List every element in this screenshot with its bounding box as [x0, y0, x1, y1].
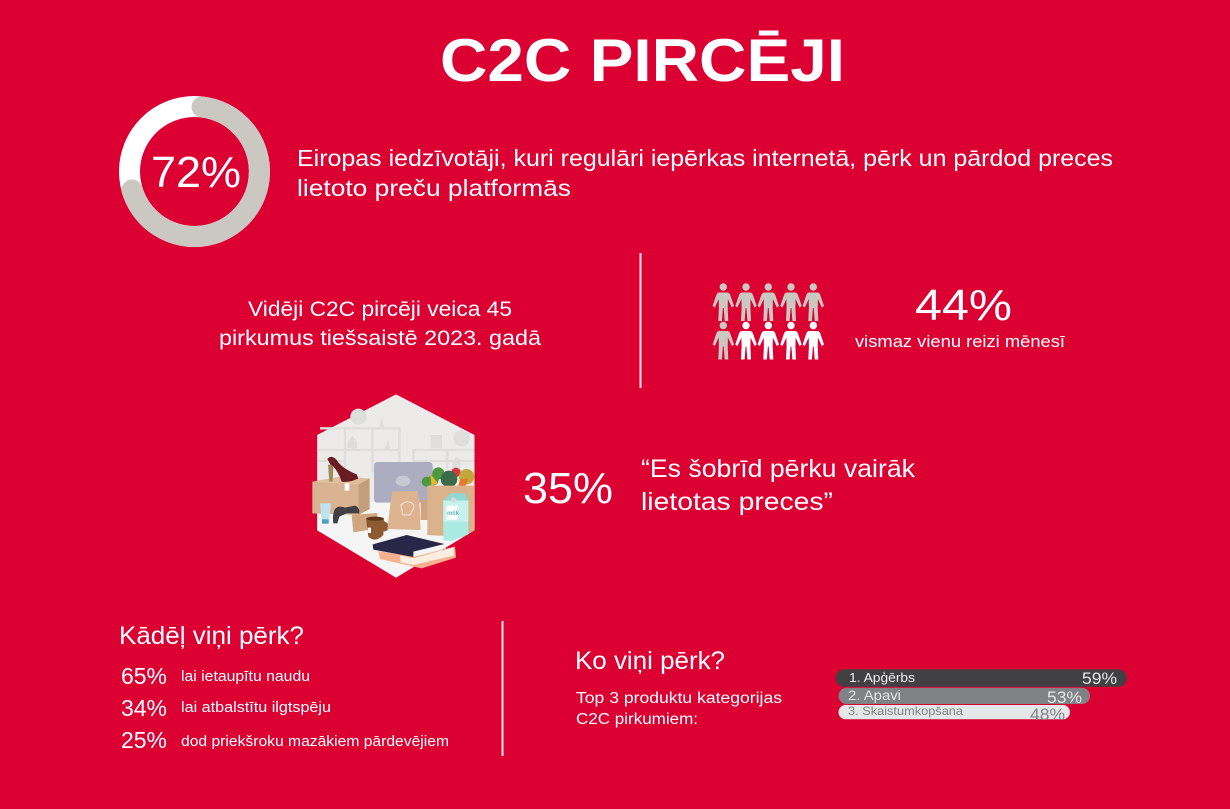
- grocery bag: [421, 500, 431, 520]
- mug: [366, 517, 384, 540]
- bar: shoes 53%: 53%: [1047, 688, 1082, 707]
- books: [378, 547, 456, 568]
- quote: [641, 455, 916, 516]
- paper bag with hat: [387, 491, 421, 530]
- bar: clothing 59%: [836, 669, 1127, 688]
- bar chart: top categories: [836, 669, 1127, 724]
- illustration: second-hand goods in hexagon: [312, 396, 474, 577]
- quote: “Es šobrīd pērku vairāk: [641, 455, 916, 483]
- title: C2C PIRCĒJI: [440, 27, 845, 94]
- text block: average purchases: [219, 298, 541, 350]
- reason: 25%: dod priekšroku mazākiem pārdevējiem: [181, 734, 449, 750]
- stat: 35%: 35%: [523, 464, 613, 513]
- reason: 25%: 25%: [121, 727, 167, 753]
- text block: European shoppers: Eiropas iedzīvotāji, kuri regulāri iepērkas internetā, pērk un pārdod preces: [297, 145, 1113, 171]
- panel: what they buy: [575, 647, 1127, 728]
- heading: why they buy: Kādēļ viņi pērk?: [119, 622, 304, 650]
- text block: European shoppers: [297, 145, 1113, 201]
- text block: top 3 categories: Top 3 produktu kategorijas: [576, 690, 782, 707]
- donut chart: 72%: [130, 106, 260, 237]
- quote: lietotas preces”: [641, 488, 833, 516]
- text block: average purchases: pirkumus tiešsaistē 2023. gadā: [219, 327, 541, 350]
- text block: top 3 categories: [576, 690, 782, 728]
- text block: top 3 categories: C2C pirkumiem:: [576, 711, 698, 728]
- laptop: [374, 462, 433, 503]
- milk carton: [443, 493, 468, 541]
- stat: 44% monthly: 44%: [915, 281, 1012, 330]
- stat: 44% monthly: [855, 281, 1065, 351]
- bar: cosmetics 48%: 48%: [1030, 705, 1065, 724]
- bar: clothing 59%: 59%: [1082, 669, 1117, 688]
- reason: 65%: lai ietaupītu naudu: [181, 669, 310, 685]
- game controller: [333, 506, 359, 523]
- high heel: [327, 457, 358, 482]
- stat: 44% monthly: vismaz vienu reizi mēnesī: [855, 332, 1065, 351]
- donut chart: 72%: 72%: [151, 148, 241, 197]
- reason: 65%: [121, 663, 310, 689]
- tube: [320, 503, 331, 523]
- reason: 34%: [121, 695, 331, 721]
- bar: clothing 59%: 1. Apģērbs: [849, 670, 916, 685]
- text block: European shoppers: lietoto preču platformās: [297, 175, 571, 201]
- reason: 25%: [121, 727, 449, 753]
- bar: shoes 53%: [838, 687, 1090, 707]
- cardboard box: [312, 477, 370, 484]
- heading: what they buy: Ko viņi pērk?: [575, 647, 725, 675]
- icon: people pictogram 44%: [713, 283, 824, 360]
- reason: 34%: lai atbalstītu ilgtspēju: [181, 700, 331, 716]
- reason: 34%: 34%: [121, 695, 167, 721]
- small box: [352, 513, 377, 532]
- bar: shoes 53%: 2. Apavi: [848, 687, 901, 703]
- panel: why they buy: [119, 622, 449, 753]
- illustration: second-hand goods in hexagon: milk: [447, 511, 460, 517]
- reason: 65%: 65%: [121, 663, 167, 689]
- bar: cosmetics 48%: [838, 704, 1070, 724]
- bar: cosmetics 48%: 3. Skaistumkopšana: [848, 704, 963, 718]
- text block: average purchases: Vidēji C2C pircēji veica 45: [248, 298, 512, 321]
